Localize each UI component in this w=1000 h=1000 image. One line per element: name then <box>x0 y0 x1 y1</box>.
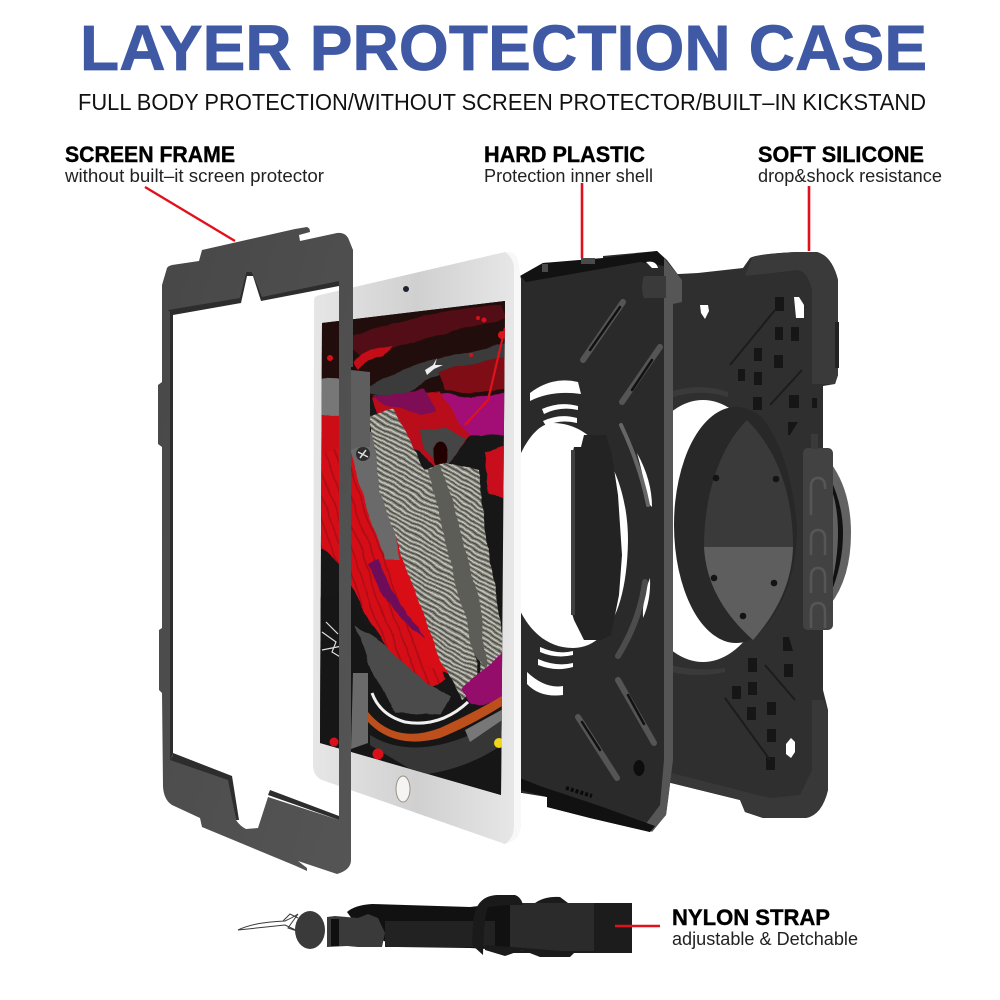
callout line: soft silicone <box>808 186 810 251</box>
soft silicone back case <box>627 252 851 818</box>
inner shell handle strap <box>571 435 622 640</box>
label: soft silicone: SOFT SILICONE <box>758 142 924 167</box>
kickstand screw <box>356 447 370 461</box>
callout line: nylon strap <box>615 925 660 927</box>
frame side tab <box>351 370 370 450</box>
strap webbing <box>347 903 632 953</box>
inner shell diagonal slots <box>578 302 660 778</box>
label: hard plastic: HARD PLASTIC <box>484 142 645 167</box>
label: nylon strap <box>672 905 858 949</box>
inner shell white slots <box>527 380 652 696</box>
callout line: hard plastic <box>581 183 583 258</box>
label: soft silicone <box>758 142 942 186</box>
tablet home button <box>396 776 410 802</box>
label: screen frame: without built–it screen protector <box>64 166 324 186</box>
label: hard plastic <box>484 142 653 186</box>
label: screen frame <box>64 142 324 186</box>
label: hard plastic: Protection inner shell <box>484 166 653 186</box>
back case circular opening <box>627 400 779 662</box>
tablet body <box>310 252 521 844</box>
label: soft silicone: drop&shock resistance <box>758 166 942 186</box>
hard plastic inner shell <box>505 251 682 832</box>
strap lanyard cord <box>238 914 300 932</box>
label: nylon strap: NYLON STRAP <box>672 905 830 930</box>
tablet screen wallpaper <box>320 301 505 795</box>
callout line: screen frame <box>145 187 235 241</box>
nylon strap <box>238 895 632 957</box>
cut-out squares <box>732 297 817 770</box>
label: screen frame: SCREEN FRAME <box>65 142 235 167</box>
handle grip <box>803 434 833 630</box>
strap disc <box>295 911 325 949</box>
disk plate <box>704 420 793 547</box>
screen frame <box>158 227 370 874</box>
subtitle: FULL BODY PROTECTION/WITHOUT SCREEN PROTECTOR/BUILT–IN KICKSTAND <box>78 89 926 115</box>
carrying handle dome <box>830 462 851 605</box>
label: nylon strap: adjustable & Detchable <box>672 929 858 949</box>
strap D-ring <box>472 895 523 955</box>
title: LAYER PROTECTION CASE <box>80 12 927 84</box>
rotating disk <box>674 407 798 643</box>
strap buckle <box>327 914 385 947</box>
tablet camera <box>403 286 409 292</box>
